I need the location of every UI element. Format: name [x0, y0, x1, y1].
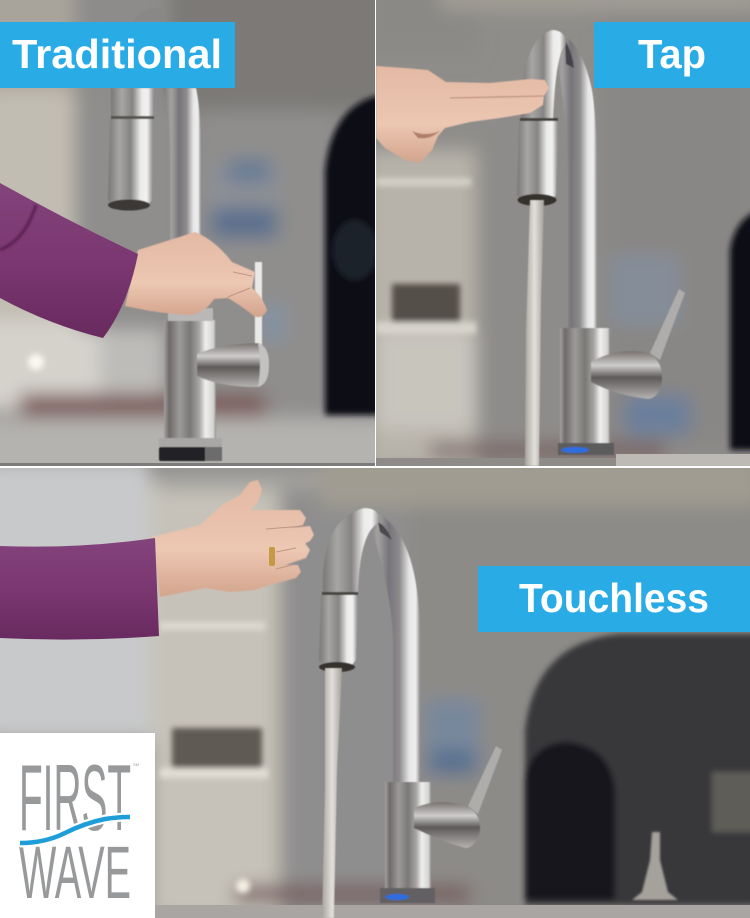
- icon: open hand with sleeve: [0, 480, 314, 640]
- icon: faucet tap: [517, 30, 685, 455]
- label: Touchless: [478, 566, 750, 632]
- label: Tap: Tap: [638, 31, 706, 77]
- label: Traditional: [0, 22, 235, 88]
- logo: First Wave: [0, 733, 155, 918]
- icon: water stream touchless: [322, 668, 342, 918]
- label: Touchless: Touchless: [519, 575, 709, 621]
- panel: tap faucet photo: [366, 0, 750, 470]
- icon: faucet touchless: [319, 508, 502, 903]
- logo: First Wave: SM: [133, 762, 139, 767]
- label: Traditional: Traditional: [12, 31, 222, 77]
- icon: background soap dispenser: [632, 832, 678, 900]
- logo: First Wave: WAVE: [19, 831, 131, 914]
- panel: traditional faucet photo: [0, 0, 400, 478]
- icon: faucet traditional: [108, 88, 270, 462]
- logo: First Wave: FIRST: [19, 745, 131, 850]
- icon: hand tapping: [376, 66, 549, 163]
- panel: touchless faucet photo: [0, 455, 750, 918]
- label: Tap: [594, 22, 750, 88]
- icon: water stream tap: [525, 200, 544, 466]
- icon: arm with sleeve reaching lever: [0, 183, 267, 338]
